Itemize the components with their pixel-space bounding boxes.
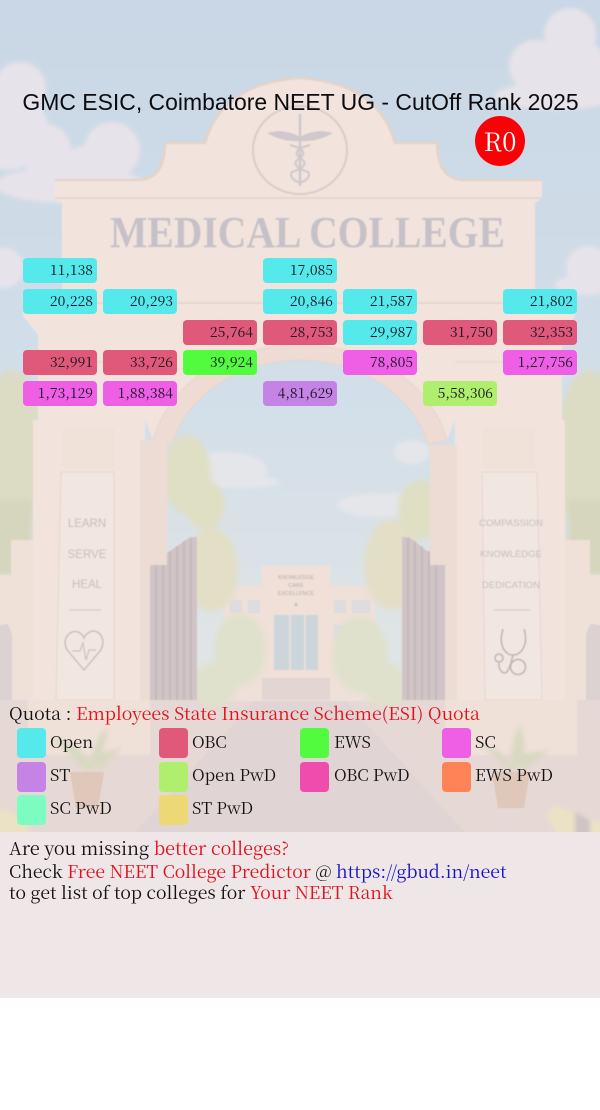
row 1 ranks: 17,085 <box>290 260 333 280</box>
legend: OBC PwD <box>334 762 410 786</box>
row 4 ranks: 33,726 <box>130 352 173 372</box>
row 2 ranks: 20,293 <box>130 291 173 311</box>
distant college building: + <box>293 600 299 610</box>
plinths <box>28 700 577 755</box>
legend: SC <box>475 729 496 753</box>
left pillar: SERVE <box>68 549 107 561</box>
background illustration: medical college gate <box>0 0 600 832</box>
legend: Open <box>50 729 93 753</box>
rank table <box>23 258 577 406</box>
left pillar: HEAL <box>72 579 103 591</box>
legend: Open PwD <box>192 762 276 786</box>
distant college building: EXCELLENCE <box>278 591 315 597</box>
side walls <box>0 540 600 700</box>
row 4 ranks <box>23 350 577 375</box>
row 5 ranks: 4,81,629 <box>278 383 333 403</box>
iron gates <box>150 537 445 700</box>
crest and caduceus <box>253 106 347 194</box>
legend: ST PwD <box>192 795 253 819</box>
legend: SC PwD <box>50 795 112 819</box>
row 4 ranks: 1,27,756 <box>518 352 573 372</box>
right pillar: COMPASSION <box>479 518 543 529</box>
medical college sign: MEDICAL COLLEGE <box>110 208 505 257</box>
row 3 ranks: 32,353 <box>530 322 573 342</box>
legend: EWS PwD <box>475 762 553 786</box>
clouds <box>0 8 600 517</box>
row 3 ranks: 31,750 <box>450 322 493 342</box>
promo panel <box>0 832 600 998</box>
distant college building: KNOWLEDGE <box>278 575 314 581</box>
row 3 ranks: 25,764 <box>210 322 253 342</box>
row 4 ranks: 39,924 <box>210 352 253 372</box>
promo line 1: Are you missing better colleges? <box>9 835 289 861</box>
sky <box>0 0 600 838</box>
right pillar <box>430 420 565 703</box>
left pillar: LEARN <box>68 518 106 530</box>
row 2 ranks: 20,846 <box>290 291 333 311</box>
gate arch structure <box>23 78 575 445</box>
row 4 ranks: 32,991 <box>50 352 93 372</box>
row 3 ranks <box>183 320 577 345</box>
outer trees <box>0 370 600 575</box>
row 5 ranks: 5,58,306 <box>438 383 493 403</box>
legend: OBC <box>192 729 227 753</box>
round badge R0 <box>475 116 525 166</box>
row 3 ranks: 29,987 <box>370 322 413 342</box>
legend: EWS <box>334 729 371 753</box>
right pillar: DEDICATION <box>482 580 540 591</box>
ground and road <box>0 695 600 838</box>
row 1 ranks <box>23 258 337 283</box>
row 4 ranks: 78,805 <box>370 352 413 372</box>
distant college building <box>225 566 375 701</box>
row 2 ranks <box>23 289 577 314</box>
row 2 ranks: 21,802 <box>530 291 573 311</box>
right pillar: KNOWLEDGE <box>480 549 542 560</box>
curb <box>0 805 600 838</box>
left pillar <box>33 420 167 703</box>
potted plants <box>52 725 550 808</box>
row 5 ranks: 1,88,384 <box>118 383 173 403</box>
inner trees <box>163 435 442 707</box>
promo line 3: to get list of top colleges for Your NEET Rank <box>9 880 393 905</box>
row 5 ranks: 1,73,129 <box>38 383 93 403</box>
row 2 ranks: 21,587 <box>370 291 413 311</box>
row 3 ranks: 28,753 <box>290 322 333 342</box>
row 1 ranks: 11,138 <box>50 260 93 280</box>
promo line 2: Check Free NEET College Predictor @ https://gbud.in/neet <box>9 859 506 884</box>
row 2 ranks: 20,228 <box>50 291 93 311</box>
row 5 ranks <box>23 381 497 406</box>
legend: ST <box>50 762 70 786</box>
round badge R0: R0 <box>484 122 516 159</box>
distant college building: CARE <box>288 583 304 589</box>
legend <box>17 728 553 825</box>
quota heading: Quota : Employees State Insurance Scheme(ESI) Quota <box>9 701 480 726</box>
title: GMC ESIC, Coimbatore NEET UG - CutOff Rank 2025 <box>22 89 579 115</box>
